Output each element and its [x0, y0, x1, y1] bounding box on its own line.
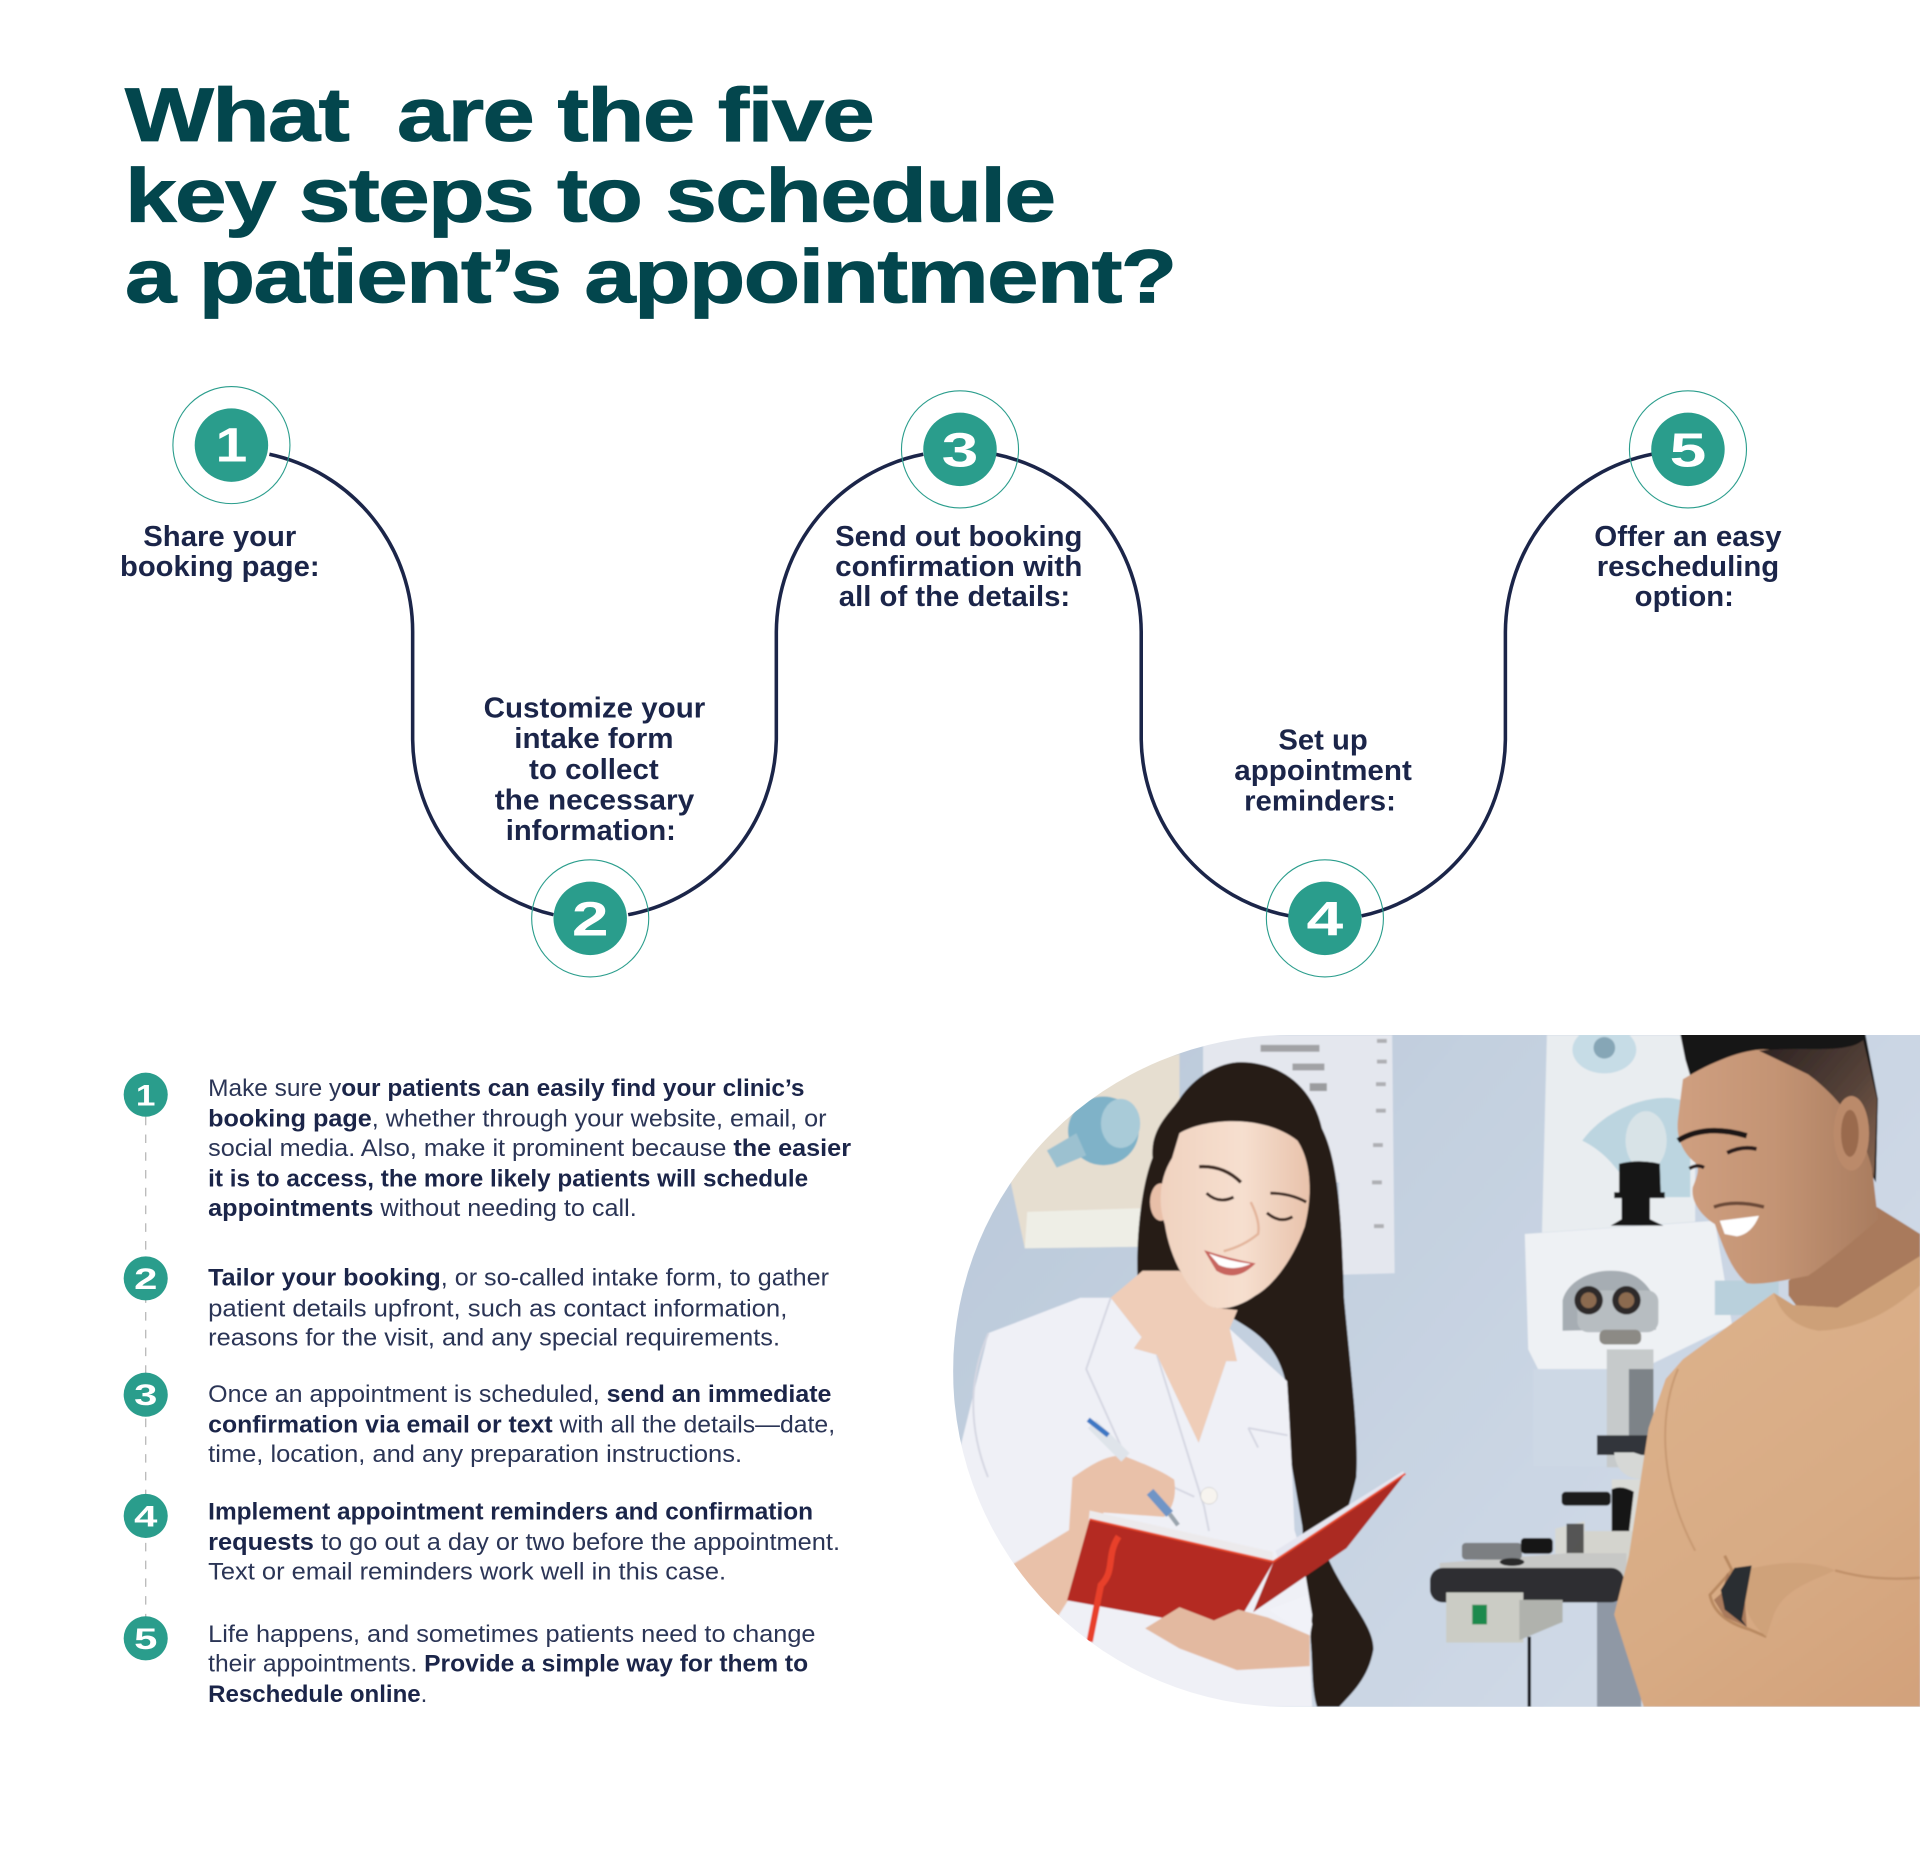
step label 1	[120, 521, 320, 583]
text block 5	[208, 1621, 816, 1708]
step label 4: appointment	[1234, 755, 1412, 787]
text block 4: Text or email reminders work well in this case.	[208, 1559, 726, 1586]
wall poster right	[1542, 1026, 1695, 1232]
step label 1: Share your	[143, 521, 296, 553]
text block 1: appointments without needing to call.	[208, 1195, 637, 1222]
eye chart	[1203, 1035, 1395, 1275]
photo: optometrist and patient	[944, 1026, 1920, 1713]
open red notebook	[1067, 1471, 1405, 1642]
step label 5: Offer an easy	[1594, 521, 1782, 553]
text block 3: time, location, and any preparation instructions.	[208, 1441, 742, 1468]
step label 5	[1594, 521, 1782, 613]
text block 2: reasons for the visit, and any special requirements.	[208, 1325, 780, 1352]
title: a patient’s appointment?	[125, 234, 1176, 319]
step label 2	[484, 693, 705, 847]
woman: facial features	[1199, 1167, 1306, 1276]
step node 4: 4	[1307, 894, 1344, 947]
text block 3: confirmation via email or text with all the details—date,	[208, 1412, 835, 1439]
list badge 3: 3	[134, 1379, 157, 1412]
step label 2: intake form	[514, 723, 673, 755]
step label 3: all of the details:	[839, 581, 1070, 613]
woman: coat folds and pocket	[973, 1298, 1288, 1531]
title: key steps to schedule	[125, 154, 1054, 239]
text block 5: Reschedule online.	[208, 1681, 427, 1708]
step node 2: 2	[572, 894, 609, 947]
title: What are the five	[125, 73, 873, 158]
text block 5: Life happens, and sometimes patients need to change	[208, 1621, 816, 1648]
step label 5: option:	[1635, 581, 1734, 613]
woman: arm and writing hand	[1012, 1455, 1175, 1618]
step label 1: booking page:	[120, 551, 320, 583]
step node 3: 3	[942, 425, 978, 478]
text block 1: booking page , whether through your website, email, or	[208, 1106, 827, 1133]
button	[1201, 1487, 1217, 1504]
title	[125, 73, 1176, 319]
step node 4	[1266, 860, 1383, 977]
step node 3	[901, 391, 1019, 508]
timeline: numbered details list	[124, 1073, 168, 1660]
text block 3	[208, 1381, 835, 1468]
woman: white coat	[944, 1298, 1312, 1707]
step label 3	[835, 521, 1082, 613]
text block 2: Tailor your booking , or so-called intake form, to gather	[208, 1265, 829, 1292]
step label 2: to collect	[529, 754, 659, 786]
slit lamp instrument	[1555, 1161, 1665, 1568]
woman: hair	[1137, 1062, 1374, 1707]
list badge 1: 1	[136, 1080, 156, 1113]
list badge 3	[124, 1373, 168, 1417]
step label 4	[1234, 724, 1412, 818]
step node 1: 1	[216, 420, 247, 473]
text block 1: social media. Also, make it prominent because the easier	[208, 1135, 851, 1162]
text block 4: Implement appointment reminders and confirmation	[208, 1499, 813, 1526]
man in tan sweater	[1614, 1030, 1920, 1707]
step node 2	[532, 860, 649, 977]
woman: face	[1161, 1121, 1310, 1308]
list badge 4: 4	[134, 1500, 158, 1533]
list badge 2: 2	[134, 1263, 157, 1296]
step label 2: information:	[506, 815, 676, 847]
step label 5: rescheduling	[1597, 551, 1779, 583]
text block 1: Make sure your patients can easily find your clinic’s	[208, 1075, 804, 1102]
step label 4: Set up	[1278, 724, 1368, 756]
woman: sleeve cuff	[1310, 1622, 1314, 1632]
winding path connecting the five steps	[269, 454, 1652, 916]
list badge 2	[124, 1256, 168, 1300]
text block 2	[208, 1265, 829, 1352]
woman: neck	[1111, 1271, 1237, 1443]
text block 1: it is to access, the more likely patients will schedule	[208, 1166, 808, 1193]
step node 5: 5	[1670, 425, 1706, 478]
text block 1	[208, 1075, 851, 1222]
glass panel and back poster	[1524, 1220, 1779, 1370]
step node 1	[173, 387, 290, 504]
list badge 4	[124, 1494, 168, 1538]
text block 4: requests to go out a day or two before the appointment.	[208, 1529, 840, 1556]
step label 4: reminders:	[1244, 786, 1396, 818]
text block 5: their appointments. Provide a simple way for them to	[208, 1650, 808, 1677]
step label 3: confirmation with	[835, 551, 1082, 583]
step label 3: Send out booking	[835, 521, 1082, 553]
text block 4	[208, 1499, 840, 1586]
text block 2: patient details upfront, such as contact information,	[208, 1295, 787, 1322]
woman: ear	[1148, 1182, 1164, 1222]
woman: supporting hand	[1145, 1607, 1310, 1670]
list badge 1	[124, 1073, 168, 1117]
step node 5	[1629, 391, 1746, 508]
list badge 5	[124, 1616, 168, 1660]
wall poster: eye anatomy	[993, 1054, 1180, 1248]
step label 2: Customize your	[484, 693, 705, 725]
step label 2: the necessary	[495, 784, 694, 816]
examination table	[1430, 1538, 1641, 1707]
list badge 5: 5	[134, 1623, 157, 1656]
pen	[1088, 1420, 1178, 1525]
text block 3: Once an appointment is scheduled, send an immediate	[208, 1381, 831, 1408]
